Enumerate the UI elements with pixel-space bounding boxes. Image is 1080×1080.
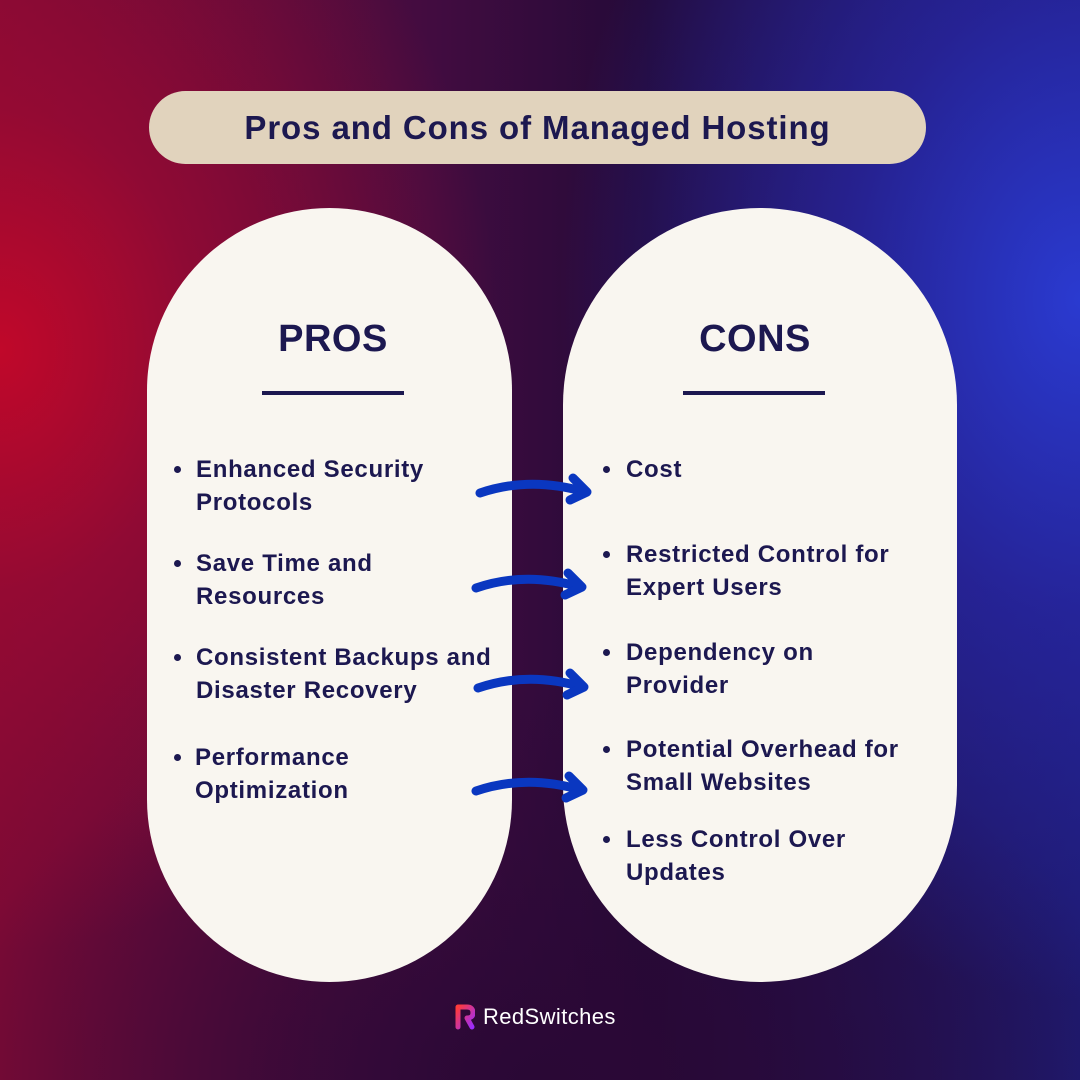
cons items: Potential Overhead for <box>626 736 899 763</box>
cons items: Cost <box>626 456 682 483</box>
title <box>149 91 926 164</box>
cons items: Dependency on <box>626 639 814 666</box>
arrow 2 <box>476 573 582 595</box>
arrow 1 <box>480 478 587 500</box>
title: Pros and Cons of Managed Hosting <box>244 109 831 146</box>
logo <box>456 1004 616 1030</box>
pros items: Resources <box>196 583 325 610</box>
cons underline <box>683 391 825 395</box>
pros heading: PROS <box>278 318 388 360</box>
arrow 3 <box>478 673 584 695</box>
arrow 4 <box>476 776 583 798</box>
pros underline <box>262 391 404 395</box>
cons items: Less Control Over <box>626 826 846 853</box>
cons items <box>603 456 899 886</box>
pros items: Save Time and <box>196 550 373 577</box>
cons items: Provider <box>626 672 729 699</box>
cons items: Restricted Control for <box>626 541 889 568</box>
pros items: Optimization <box>195 777 349 804</box>
panel: pros <box>147 208 512 982</box>
logo text: RedSwitches <box>483 1004 616 1029</box>
cons items: Updates <box>626 859 726 886</box>
cons heading: CONS <box>699 318 811 360</box>
pros items: Protocols <box>196 489 313 516</box>
pros items <box>174 456 491 804</box>
pros items: Performance <box>195 744 349 771</box>
panel: cons <box>563 208 957 982</box>
pros items: Enhanced Security <box>196 456 424 483</box>
pros items: Consistent Backups and <box>196 644 491 671</box>
pros items: Disaster Recovery <box>196 677 417 704</box>
logo icon <box>456 1004 475 1030</box>
cons items: Expert Users <box>626 574 782 601</box>
cons items: Small Websites <box>626 769 811 796</box>
